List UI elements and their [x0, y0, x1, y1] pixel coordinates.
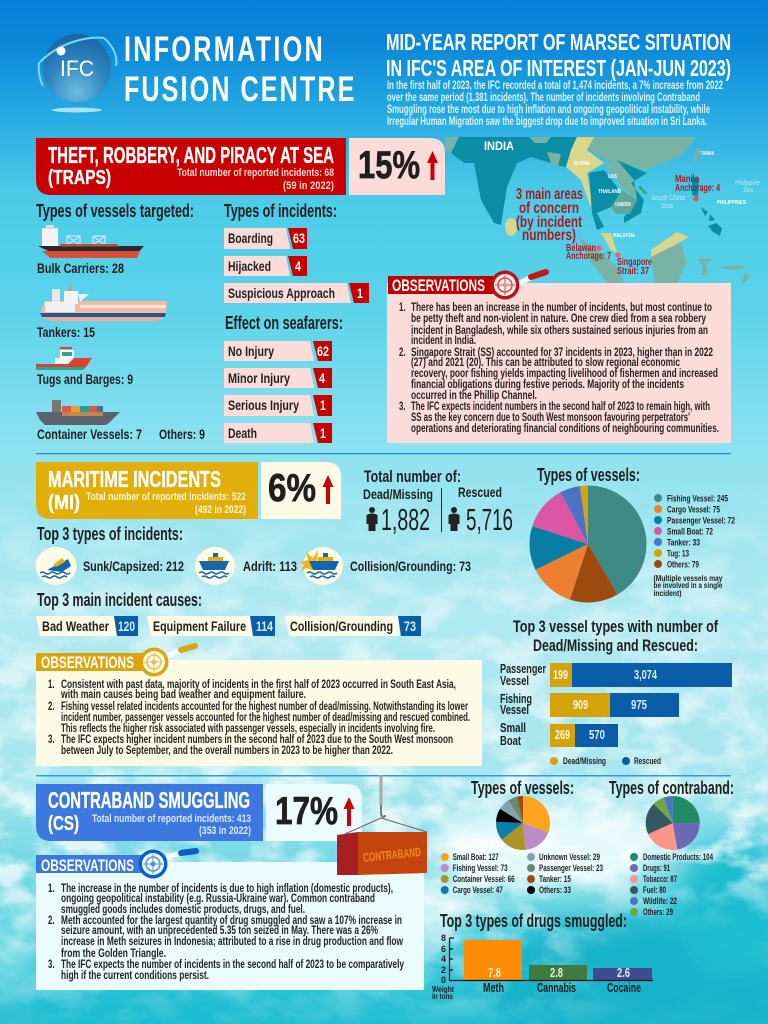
panel: MI observations: incident number, passenger vessels accounted for the highest number of dead/missing and rescued combined. [61, 712, 470, 724]
bar chart: drugs smuggled: 4 [441, 954, 446, 964]
panel: TRAPS banner [36, 138, 346, 195]
map: South East Asia: South China [651, 195, 685, 202]
bar: minor injury 4 [224, 368, 332, 388]
panel: TRAPS banner: THEFT, ROBBERY, AND PIRACY AT SEA [48, 142, 334, 168]
legend: types of contraband: Fuel: 80 [643, 885, 666, 895]
panel: CS observations: 1. [48, 883, 54, 895]
stat: total dead/missing and rescued: 5,716 [466, 502, 513, 537]
legend: CS types of vessels: Cargo Vessel: 47 [453, 885, 503, 895]
stat: CS 17% increase [266, 784, 362, 841]
panel: CS observations [36, 850, 424, 990]
panel: MI observations: OBSERVATIONS [41, 653, 134, 672]
panel: CS banner: (CS) [48, 813, 79, 835]
bar chart: dead/missing and rescued: Fishing [500, 691, 532, 706]
panel: TRAPS banner: (59 in 2022) [283, 180, 334, 192]
panel: CS observations: ongoing geopolitical instability (e.g. Russia-Ukraine war). Common contraband [61, 893, 375, 905]
bar: death 1 [224, 423, 332, 443]
bar: collision or grounding 73: 73 [404, 619, 416, 634]
panel: CS banner [36, 784, 263, 841]
panel: CS observations: 3. [48, 959, 54, 971]
callout: Manila Anchorage: Manila [675, 173, 699, 185]
legend: dead/missing and rescued [550, 756, 661, 766]
bar chart: dead/missing and rescued: Boat [500, 733, 521, 748]
panel: TRAPS observations: OBSERVATIONS [392, 276, 485, 295]
panel: CS banner: (353 in 2022) [199, 825, 251, 837]
bar: equipment failure 114: 114 [256, 619, 273, 634]
bar chart: dead/missing and rescued [500, 661, 732, 766]
legend: CS types of vessels: Passenger Vessel: 23 [539, 863, 603, 873]
legend: dead/missing and rescued: Rescued [634, 756, 661, 766]
legend: MI types of vessels [654, 494, 735, 598]
callout: Singapore Strait: Strait: 37 [617, 265, 649, 277]
panel: TRAPS observations: 3. [399, 401, 406, 413]
heading: effect on seafarers: Effect on seafarers: [225, 313, 343, 333]
title: Information Fusion Centre [124, 30, 354, 109]
map: South East Asia: PHILIPPINES [717, 200, 747, 206]
panel: TRAPS observations: incident in India. [411, 335, 476, 347]
panel: MI observations: The IFC expects higher incident numbers in the second half of 2023 due to the South West monsoon [61, 734, 453, 746]
bar chart: drugs smuggled: 0 [441, 975, 446, 985]
map: South East Asia: CAMBODIA [615, 202, 631, 208]
panel: MI banner: (MI) [48, 492, 80, 514]
map: South East Asia: MALAYSIA [613, 233, 635, 239]
panel: MI banner: MARITIME INCIDENTS [48, 466, 221, 492]
callout: Belawan Anchorage: Belawan [566, 242, 596, 254]
heading: types of incidents: Types of incidents: [224, 201, 337, 221]
icon: CS magnifier [36, 850, 196, 878]
bar: bad weather 120: 120 [118, 619, 135, 634]
legend: types of contraband [630, 852, 713, 917]
bar: boarding 63: Boarding [228, 231, 273, 246]
map: South East Asia: LAOS [608, 174, 617, 180]
panel: CS observations: from the Golden Triangle. [61, 948, 166, 960]
icon: bulk carrier [38, 225, 144, 258]
panel: MI observations: Fishing vessel related incidents accounted for the highest number of dead/missing. Notwithstanding its lower [61, 701, 468, 713]
callout: Belawan Anchorage: Anchorage: 7 [566, 250, 611, 262]
bar chart: dead/missing and rescued: Vessel [500, 702, 529, 717]
bar: hijacked 4: 4 [295, 259, 301, 274]
pie chart: MI types of vessels [529, 486, 646, 602]
bar chart: drugs smuggled: 6 [441, 944, 446, 954]
legend: CS types of vessels: Container Vessel: 66 [453, 874, 515, 884]
bar chart: dead/missing and rescued: 570 [589, 727, 605, 742]
panel: MI observations: 3. [48, 734, 54, 746]
icon: hanging contraband container: CONTRABAND [362, 845, 422, 865]
map: South East Asia: Philippine [735, 180, 760, 187]
legend: types of contraband: Domestic Products: 104 [643, 852, 713, 862]
legend: CS types of vessels: Tanker: 15 [539, 874, 571, 884]
icon: TRAPS magnifier [388, 270, 546, 300]
legend: types of contraband: Drugs: 91 [643, 863, 670, 873]
map: South East Asia [445, 137, 760, 283]
title: Information Fusion Centre: FUSION CENTRE [124, 70, 354, 109]
pie chart: types of contraband [646, 796, 700, 850]
bar chart: drugs smuggled [432, 933, 653, 1001]
panel: TRAPS banner: (TRAPS) [48, 167, 111, 189]
bar chart: drugs smuggled: Cannabis [537, 980, 576, 995]
panel: CS observations: seizure amount, with an unprecedented 5.35 ton seized in May. There was a 26% [61, 925, 378, 937]
stat: TRAPS 15% increase: 15% [358, 144, 420, 187]
icon: hanging contraband container [337, 775, 427, 875]
legend: MI types of vessels: Fishing Vessel: 245 [667, 494, 728, 504]
label: collision or grounding: Collision/Grounding: 73 [350, 559, 471, 574]
bar: equipment failure 114: Equipment Failure [153, 619, 246, 634]
map: South East Asia: THAILAND [598, 189, 621, 195]
bar chart: dead/missing and rescued: 199 [553, 667, 568, 682]
bar: no injury 62 [224, 341, 332, 361]
panel: CS observations: The IFC expects the number of incidents in the second half of 2023 to be comparatively [61, 959, 404, 971]
legend: MI types of vessels: Tug: 13 [667, 548, 689, 558]
bar: serious injury 1: Serious Injury [228, 398, 299, 413]
legend: MI types of vessels: Small Boat: 72 [667, 526, 713, 536]
legend: types of contraband: Tobacco: 87 [643, 874, 677, 884]
stat: total dead/missing and rescued: Total number of: [364, 468, 461, 486]
bar: death 1: Death [228, 426, 257, 441]
label: tugs and barges: Tugs and Barges: 9 [37, 372, 133, 387]
map: South East Asia: INDIA [484, 141, 514, 153]
legend: MI types of vessels: (Multiple vessels may [654, 573, 723, 583]
bar chart: drugs smuggled: 2 [441, 965, 446, 975]
label: bulk carriers: Bulk Carriers: 28 [37, 261, 124, 276]
label: adrift: Adrift: 113 [243, 559, 297, 574]
bar: no injury 62: 62 [317, 344, 329, 359]
bar: no injury 62: No Injury [228, 344, 274, 359]
legend: dead/missing and rescued: Dead/Missing [563, 756, 606, 766]
bar chart: dead/missing and rescued: Passenger [500, 661, 546, 676]
bar: hijacked 4: Hijacked [228, 259, 271, 274]
bar chart: drugs smuggled: 2.8 [550, 965, 563, 980]
heading: MI types of vessels: Types of vessels: [537, 465, 640, 485]
panel: MI banner: Total number of reported incidents: 522 [86, 491, 246, 503]
panel: MI banner [36, 462, 258, 519]
legend: MI types of vessels: be involved in a single [654, 580, 723, 590]
icon: adrift ship [195, 547, 235, 585]
icon: container vessel [36, 400, 120, 425]
bar chart: dead/missing and rescued: 975 [631, 697, 647, 712]
bar: death 1: 1 [320, 426, 326, 441]
stat: MI 6% increase: 6% [268, 467, 316, 510]
stat: total dead/missing and rescued: 1,882 [381, 502, 430, 537]
panel: CS observations: smuggled goods includes domestic products, drugs, and fuel. [61, 904, 305, 916]
bar chart: dead/missing and rescued: Vessel [500, 673, 529, 688]
callout: Belawan Anchorage [566, 242, 611, 262]
callout: Singapore Strait: Singapore [617, 256, 652, 268]
panel: CS observations: high if the current conditions persist. [61, 970, 209, 982]
stat: total dead/missing and rescued: Rescued [458, 484, 502, 500]
panel: CS banner: Total number of reported incidents: 413 [92, 813, 251, 825]
bar: equipment failure 114 [147, 616, 275, 636]
panel: CS observations: 2. [48, 915, 54, 927]
panel: TRAPS observations: occurred in the Phillip Channel. [411, 390, 537, 402]
panel: MI observations: between July to September, and the overall numbers in 2023 to be higher than 2022. [61, 745, 393, 757]
bar: collision or grounding 73: Collision/Grounding [290, 619, 393, 634]
label: other vessels: Others: 9 [159, 427, 205, 442]
stat: total dead/missing and rescued [363, 468, 513, 537]
legend: CS types of vessels: Small Boat: 127 [453, 852, 499, 862]
icon: person dead/missing [366, 507, 378, 531]
heading: top 3 types of incidents: Top 3 types of incidents: [37, 524, 183, 544]
legend: types of contraband: Wildlife: 22 [643, 896, 677, 906]
icon: sunk ship [36, 547, 76, 585]
bar: serious injury 1 [224, 395, 332, 416]
legend: MI types of vessels: Tanker: 33 [667, 538, 700, 548]
panel: MI observations: Consistent with past data, majority of incidents in the first half of 2023 occurred in South East Asia, [61, 679, 456, 691]
map: South East Asia: TAIWAN [701, 151, 714, 157]
callout: 3 main areas of concern: of concern [519, 200, 579, 217]
bar chart: dead/missing and rescued: Small [500, 720, 526, 735]
callout: 3 main areas of concern: (by incident [516, 214, 582, 231]
bar: suspicious approach 1: 1 [357, 286, 363, 301]
map: South East Asia: Sea [743, 187, 753, 194]
heading: types of vessels targeted: Types of vessels targeted: [36, 201, 194, 221]
bar: minor injury 4: Minor Injury [228, 371, 290, 386]
panel: CS observations: OBSERVATIONS [41, 856, 134, 875]
callout: Manila Anchorage [675, 173, 720, 202]
panel: CS observations: increase in Meth seizures in Indonesia; attributed to a rise in drug production and flow [61, 936, 403, 948]
bar chart: dead/missing and rescued: 3,074 [634, 667, 658, 682]
bar chart: drugs smuggled: 2.6 [617, 965, 630, 980]
heading: CS types of vessels: Types of vessels: [471, 778, 574, 798]
icon: tanker [40, 283, 167, 321]
pie chart: CS types of vessels [496, 796, 550, 850]
panel: MI observations: with main causes being bad weather and equipment failure. [60, 689, 306, 701]
bar chart: drugs smuggled: Meth [483, 980, 504, 995]
label: tankers: Tankers: 15 [37, 325, 95, 340]
panel: CS observations: Meth accounted for the largest quantity of drug smuggled and saw a 107% increase in [61, 915, 402, 927]
callout: 3 main areas of concern: numbers) [522, 227, 576, 244]
stat: MI 6% increase [261, 462, 341, 519]
bar: minor injury 4: 4 [319, 371, 325, 386]
legend: CS types of vessels: Others: 33 [539, 885, 571, 895]
legend: MI types of vessels: Passenger Vessel: 72 [667, 516, 735, 526]
bar: suspicious approach 1: Suspicious Approach [228, 286, 335, 301]
bar: serious injury 1: 1 [320, 398, 326, 413]
bar chart: drugs smuggled: Cocaine [607, 980, 641, 995]
legend: types of contraband: Others: 29 [643, 907, 673, 917]
icon: MI magnifier [36, 646, 195, 676]
callout: 3 main areas of concern: 3 main areas [516, 186, 583, 203]
bar chart: drugs smuggled: Weight [432, 984, 454, 994]
stat: TRAPS 15% increase [349, 138, 445, 195]
panel: MI observations [36, 646, 482, 766]
map: South East Asia: Sea [661, 203, 673, 210]
bar: bad weather 120 [36, 616, 138, 636]
legend: CS types of vessels [441, 852, 603, 895]
bar: boarding 63 [224, 228, 307, 249]
bar chart: dead/missing and rescued: 269 [555, 727, 570, 742]
bar chart: dead/missing and rescued: 909 [573, 697, 588, 712]
heading: top 3 vessel types [513, 617, 718, 655]
bar chart: drugs smuggled: in tons [432, 991, 453, 1001]
heading: report title [386, 29, 731, 81]
bar chart: drugs smuggled: 8 [441, 933, 446, 943]
map: South East Asia: BURMA [574, 161, 590, 167]
logo: IFC globe [39, 34, 116, 112]
panel: CS banner: CONTRABAND SMUGGLING [48, 787, 250, 813]
panel: MI observations: This reflects the higher risk associated with passenger vessels, especially in incidents involving fire. [61, 723, 435, 735]
stat: total dead/missing and rescued: Dead/Missing [363, 486, 433, 502]
panel: TRAPS observations: 1. [399, 302, 406, 314]
heading: top 3 vessel types: Dead/Missing and Rescued: [533, 636, 698, 655]
bar: boarding 63: 63 [293, 231, 305, 246]
legend: MI types of vessels: incident) [654, 588, 682, 598]
logo: IFC globe: IFC [60, 56, 94, 81]
stat: CS 17% increase: 17% [275, 790, 338, 833]
panel: MI banner: (492 in 2022) [195, 504, 246, 516]
panel: TRAPS banner: Total number of reported incidents: 68 [177, 167, 334, 179]
icon: tug [36, 347, 92, 370]
panel: CS observations: The increase in the number of incidents is due to high inflation (domestic products), [61, 883, 393, 895]
label: sunk or capsized: Sunk/Capsized: 212 [83, 559, 184, 574]
legend: CS types of vessels: Unknown Vessel: 29 [539, 852, 600, 862]
legend: MI types of vessels: Cargo Vessel: 75 [667, 504, 720, 514]
label: container vessels: Container Vessels: 7 [37, 427, 142, 442]
heading: top 3 main incident causes: Top 3 main incident causes: [37, 590, 202, 610]
legend: CS types of vessels: Fishing Vessel: 73 [453, 863, 508, 873]
panel: TRAPS observations [387, 270, 731, 443]
callout: Manila Anchorage: Anchorage: 4 [675, 182, 720, 194]
callout: Singapore Strait [615, 252, 652, 277]
panel: MI observations: 2. [48, 701, 54, 713]
icon: person rescued [448, 507, 460, 531]
title: Information Fusion Centre: INFORMATION [124, 30, 323, 69]
heading: top 3 types of drugs smuggled: Top 3 types of drugs smuggled: [440, 911, 627, 931]
bar: hijacked 4 [224, 256, 307, 276]
bar: bad weather 120: Bad Weather [42, 619, 110, 634]
panel: TRAPS observations: 2. [399, 347, 406, 359]
callout: 3 main areas of concern [516, 186, 583, 244]
icon: collision ship [300, 547, 343, 585]
text block: introduction [387, 80, 723, 128]
legend: MI types of vessels: Others: 79 [667, 560, 699, 570]
panel: MI observations: 1. [48, 679, 54, 691]
bar chart: drugs smuggled: 7.8 [488, 965, 501, 980]
